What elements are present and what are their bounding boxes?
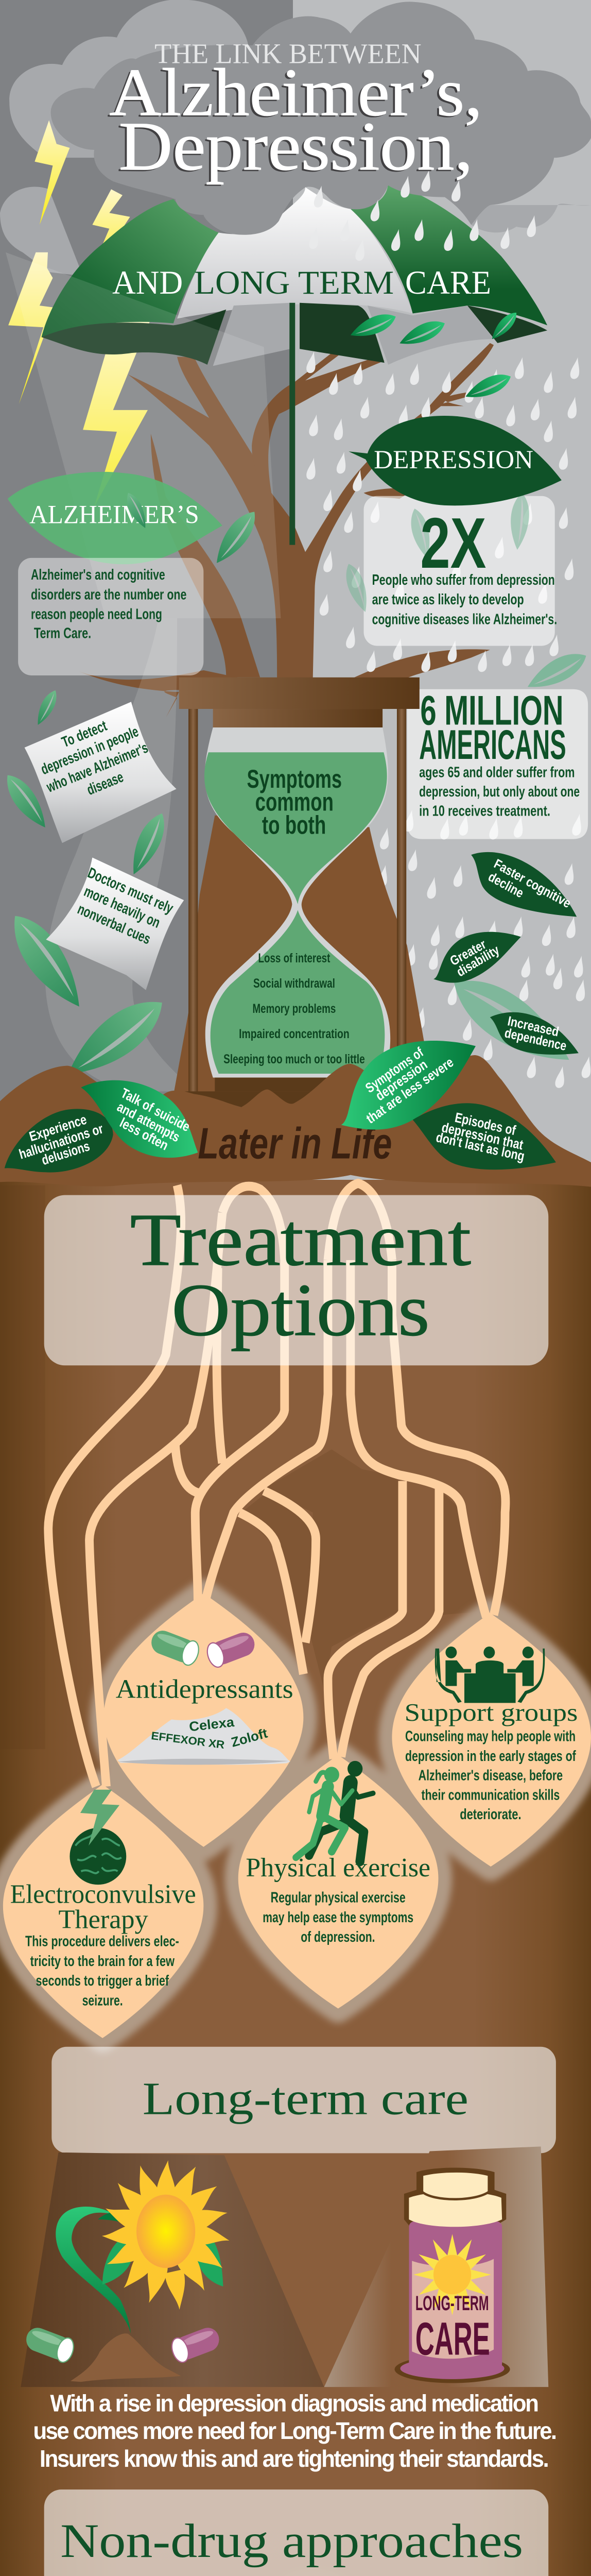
umbrella canopy centre panel (177, 188, 413, 318)
symptoms list: Memory problems (253, 1002, 336, 1016)
text box: Alzheimer's fact (18, 558, 203, 675)
leaf: talk of suicide: less often (117, 1114, 171, 1154)
icon: pile of pills: Celexa (188, 1715, 235, 1735)
hourglass frame (179, 677, 420, 1107)
symptoms list (223, 952, 365, 1066)
back clouds (0, 0, 591, 276)
icon: long-term care bottle: CARE (415, 2313, 490, 2365)
leaf: symptoms less severe: that are less severe (363, 1054, 456, 1127)
text: electroconvulsive therapy: seconds to trigger a brief (36, 1973, 169, 1989)
icon: green capsule (148, 1626, 202, 1668)
icon: long-term care bottle (395, 2167, 510, 2383)
leaf: greater disability: Greater (448, 937, 489, 969)
icon: green capsule on ground (23, 2324, 77, 2365)
title: Alzheimer’s, (109, 55, 482, 130)
text box: 2X fact (341, 492, 557, 646)
icon: pile of pills: EFFEXOR XR (150, 1730, 225, 1751)
leaf: episodes don't last as long: depression that (440, 1119, 525, 1153)
darker shading between roots (0, 1185, 486, 1749)
text box: Alzheimer's fact: Term Care. (34, 625, 91, 641)
roots (48, 1183, 506, 1787)
symptoms list: Loss of interest (258, 952, 330, 965)
glows behind labels (0, 2564, 437, 2576)
panel: treatment options heading: Treatment (130, 1198, 471, 1281)
hourglass glass (205, 727, 390, 1078)
icon: long-term care bottle: LONG-TERM (415, 2292, 489, 2315)
panel: treatment options heading: Options (171, 1268, 430, 1351)
tree (79, 343, 494, 718)
pod: electroconvulsive therapy (3, 1785, 203, 2038)
light beam behind bottle (324, 2146, 548, 2387)
note: detecting depression: To detect (60, 717, 110, 751)
heading: support groups: Support groups (405, 1699, 578, 1726)
panel: treatment options heading (44, 1195, 548, 1365)
note: nonverbal cues: nonverbal cues (75, 901, 153, 948)
lightning bolts (8, 120, 151, 506)
text: long-term care statement (33, 2390, 557, 2472)
icon: brain with lightning (69, 1790, 126, 1885)
leaf banner: Alzheimer's: ALZHEIMER’S (29, 500, 199, 529)
hourglass heading: to both (262, 811, 326, 840)
leaf: greater disability: disability (454, 942, 502, 980)
leaf banner: Depression: DEPRESSION (374, 445, 533, 474)
leaf: experience hallucinations: delusions (40, 1138, 92, 1168)
symptoms list: Impaired concentration (239, 1027, 350, 1041)
icon: meeting table (435, 1647, 545, 1703)
text box: 2X fact: 2X (420, 503, 486, 583)
pod: support groups (392, 1613, 591, 1867)
hourglass lower green (211, 910, 385, 1074)
text: physical exercise: may help ease the symptoms (263, 1909, 413, 1926)
title: Depression, (116, 110, 471, 187)
trunk behind hourglass (173, 816, 426, 1095)
panel: non-drug approaches heading: Non-drug approaches (60, 2514, 523, 2567)
text: support groups: deteriorate. (460, 1806, 522, 1823)
text box: Alzheimer's fact: reason people need Long (31, 606, 162, 623)
leaf: talk of suicide: and attempts (115, 1098, 182, 1145)
text box: 6 million Americans: in 10 receives treatment. (419, 803, 550, 820)
text box: 6 million Americans (407, 687, 588, 839)
heading: physical exercise: Physical exercise (246, 1853, 430, 1883)
text: physical exercise: Regular physical exercise (271, 1889, 406, 1906)
background: storm sky dark and light halves (0, 0, 591, 1185)
heading: electroconvulsive therapy: Electroconvulsive (10, 1879, 196, 1909)
note: detecting depression: disease (85, 769, 126, 799)
leaf banner: Alzheimer's (8, 472, 222, 564)
title: LONG TERM (194, 264, 394, 301)
heading: antidepressants: Antidepressants (116, 1674, 293, 1704)
pod halos (3, 1594, 591, 2038)
umbrella pole (289, 303, 295, 545)
symptoms list: Sleeping too much or too little (223, 1053, 365, 1066)
leaf: faster cognitive decline: Faster cognitive (492, 856, 573, 911)
text box: 2X fact: are twice as likely to develop (372, 591, 524, 608)
leaf: faster cognitive decline: decline (486, 870, 526, 901)
leaf: talk of suicide (81, 1080, 198, 1158)
panel: long-term care heading (51, 2047, 556, 2153)
text: later in life: Later in Life (198, 1118, 392, 1168)
icon: runners (296, 1761, 373, 1861)
title: Alzheimer’s, (107, 56, 480, 131)
note: detecting depression: depression in people (39, 723, 141, 778)
panel: Depression (341, 416, 562, 646)
heading: electroconvulsive therapy: Therapy (58, 1905, 148, 1935)
umbrella canopy left panel (42, 199, 219, 337)
text: electroconvulsive therapy: This procedure delivers elec- (25, 1933, 179, 1950)
note: detecting depression: who have Alzheimer's (44, 739, 150, 796)
note: nonverbal cues (46, 858, 184, 990)
rain (306, 170, 590, 1088)
leaf: faster cognitive decline (471, 852, 577, 917)
icon: purple capsule (204, 1629, 258, 1670)
umbrella canopy right panel (351, 181, 547, 325)
text: electroconvulsive therapy: tricity to the brain for a few (30, 1953, 175, 1970)
text: support groups (405, 1728, 576, 1823)
title: CARE (405, 264, 491, 301)
text: electroconvulsive therapy (25, 1933, 179, 2009)
leaf: talk of suicide: Talk of suicide (118, 1085, 193, 1135)
title: THE LINK BETWEEN (154, 38, 422, 70)
hourglass heading (247, 765, 342, 840)
pod: antidepressants (103, 1594, 303, 1847)
note: nonverbal cues: Doctors must rely (85, 865, 176, 917)
text box: Alzheimer's fact: Alzheimer's and cognitive (31, 566, 165, 583)
icon: purple capsule on ground (169, 2324, 222, 2365)
icon: wilted sunflower (56, 2160, 231, 2382)
umbrella underside (42, 310, 226, 365)
panel: long-term care heading: Long-term care (143, 2073, 468, 2125)
hourglass heading: common (255, 788, 334, 817)
pod: physical exercise (238, 1755, 438, 2008)
text: long-term care statement: Insurers know this and are tightening their standards. (40, 2445, 549, 2472)
leaf: greater disability (433, 932, 521, 983)
icon: pile of pills: Zoloft (230, 1726, 269, 1750)
leaf: episodes don't last as long: Episodes of (454, 1109, 517, 1138)
title: AND (112, 264, 183, 301)
small leaf on banner (123, 490, 151, 531)
shadow beam behind sunflower (21, 2153, 324, 2387)
background: underground soil (0, 1180, 591, 2576)
icon: pile of pills (117, 1708, 290, 1765)
text: long-term care statement: With a rise in depression diagnosis and medication (50, 2390, 539, 2417)
symptoms list: Social withdrawal (253, 977, 335, 991)
leaf: experience hallucinations: hallucinations or (17, 1121, 105, 1162)
leaf: increased dependence: dependence (503, 1026, 568, 1054)
note: detecting depression (25, 702, 177, 843)
text: long-term care statement: use comes more need for Long-Term Care in the future. (33, 2417, 557, 2444)
leaf: episodes don't last as long (413, 1103, 556, 1170)
leaf: episodes don't last as long: don't last as long (434, 1129, 526, 1164)
floating leaves (0, 309, 591, 1090)
front storm cloud (51, 2, 591, 235)
hourglass (179, 677, 420, 1107)
umbrella (42, 181, 547, 545)
leaf: increased dependence (490, 1012, 579, 1055)
soil mound (0, 1055, 591, 1187)
hourglass upper green (204, 752, 387, 904)
leaf: increased dependence: Increased (507, 1014, 560, 1040)
heading: electroconvulsive therapy (10, 1879, 196, 1935)
note: nonverbal cues: more heavily on (81, 883, 163, 931)
panel: non-drug approaches heading (44, 2489, 548, 2576)
translucent light beam (6, 252, 281, 618)
leaf: experience hallucinations: Experience (27, 1111, 89, 1144)
title (107, 38, 491, 301)
hourglass heading: Symptoms (247, 765, 342, 793)
text box: Alzheimer's fact: disorders are the number one (31, 586, 186, 603)
leaf: experience hallucinations (5, 1109, 113, 1173)
wavy translucent mist (45, 618, 196, 1091)
title: Depression, (119, 108, 473, 185)
panel: Alzheimer's (8, 472, 222, 675)
text: electroconvulsive therapy: seizure. (82, 1992, 123, 2009)
leaf: symptoms less severe: depression (373, 1056, 430, 1104)
leaf banner: Depression (349, 416, 562, 505)
leaf: symptoms less severe: Symptoms of (362, 1044, 426, 1096)
text: physical exercise (263, 1889, 413, 1945)
text: physical exercise: of depression. (301, 1929, 375, 1945)
